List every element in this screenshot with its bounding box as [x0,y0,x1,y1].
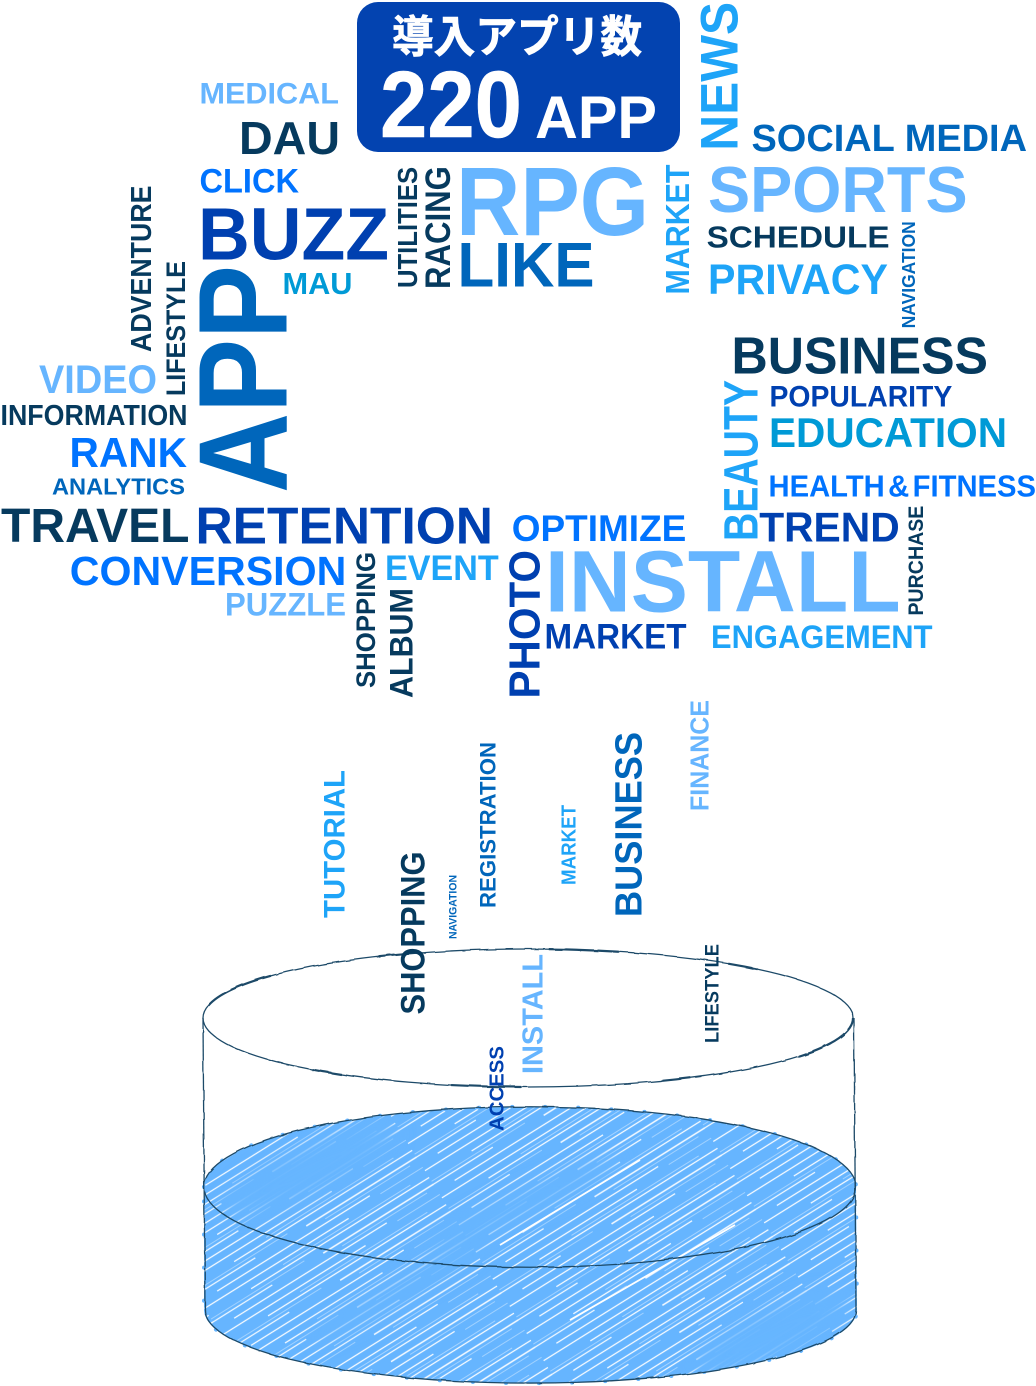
word: FINANCE: FINANCE [684,700,714,811]
word cloud [0,2,1036,698]
word: INSTALL: INSTALL [518,954,550,1074]
word: BUSINESS: BUSINESS [608,732,650,917]
word: REGISTRATION: REGISTRATION [476,742,500,908]
word: BUSINESS: BUSINESS [732,328,988,386]
word: ADVENTURE vertical: ADVENTURE [126,186,158,352]
word: VIDEO: VIDEO [39,358,157,402]
word: PUZZLE: PUZZLE [225,587,346,623]
word: NAVIGATION: NAVIGATION [448,875,460,939]
word: INFORMATION: INFORMATION [0,400,188,432]
word: NAVIGATION vertical: NAVIGATION [899,221,919,328]
word: OPTIMIZE: OPTIMIZE [512,508,686,549]
falling words [318,700,724,1131]
word: RETENTION: RETENTION [196,498,493,556]
word: SOCIAL MEDIA: SOCIAL MEDIA [752,118,1027,160]
word: MARKET vertical: MARKET [659,164,696,294]
word: PHOTO vertical: PHOTO [500,550,550,698]
word: CONVERSION: CONVERSION [70,548,346,594]
cylinder [203,949,857,1386]
badge number: 220 [380,52,522,158]
word: BEAUTY vertical: BEAUTY [716,380,769,541]
word: LIFESTYLE vertical: LIFESTYLE [161,261,191,396]
word: LIKE: LIKE [458,231,594,301]
word: DAU: DAU [239,112,340,164]
word: SHOPPING vertical: SHOPPING [351,552,381,688]
word: BUZZ: BUZZ [198,192,389,276]
word: UTILITIES vertical: UTILITIES [392,167,423,288]
word: SPORTS: SPORTS [708,153,968,226]
word: SHOPPING: SHOPPING [394,852,432,1014]
word: TREND: TREND [759,504,900,550]
word: PURCHASE vertical: PURCHASE [904,506,928,616]
badge heading: 導入アプリ数 [392,13,642,62]
word: CLICK: CLICK [200,162,299,200]
badge: app count [357,2,680,158]
word: MARKET: MARKET [544,617,686,656]
word: RACING vertical: RACING [419,166,458,289]
word: MEDICAL: MEDICAL [200,78,339,110]
word: ALBUM vertical: ALBUM [384,588,420,698]
word: RANK: RANK [70,429,187,476]
word: APP vertical: APP [173,265,314,493]
word: MARKET: MARKET [558,805,580,885]
word: SCHEDULE: SCHEDULE [707,220,890,254]
word: LIFESTYLE: LIFESTYLE [702,944,724,1043]
word: ACCESS: ACCESS [486,1046,508,1131]
cylinder liquid fill [204,1107,857,1386]
word: TRAVEL: TRAVEL [1,500,190,553]
word: TUTORIAL: TUTORIAL [318,770,352,918]
word: PRIVACY: PRIVACY [708,256,888,304]
word: EVENT: EVENT [385,549,499,588]
word: POPULARITY: POPULARITY [770,381,953,414]
word: MAU: MAU [282,266,352,301]
word: EDUCATION: EDUCATION [769,409,1007,456]
word: INSTALL: INSTALL [545,534,901,631]
word: RPG: RPG [456,147,649,256]
badge background [357,2,680,152]
cylinder outlines [203,949,856,1383]
word: ENGAGEMENT: ENGAGEMENT [711,619,933,655]
word: ANALYTICS: ANALYTICS [52,474,185,500]
badge unit: APP [535,84,657,151]
